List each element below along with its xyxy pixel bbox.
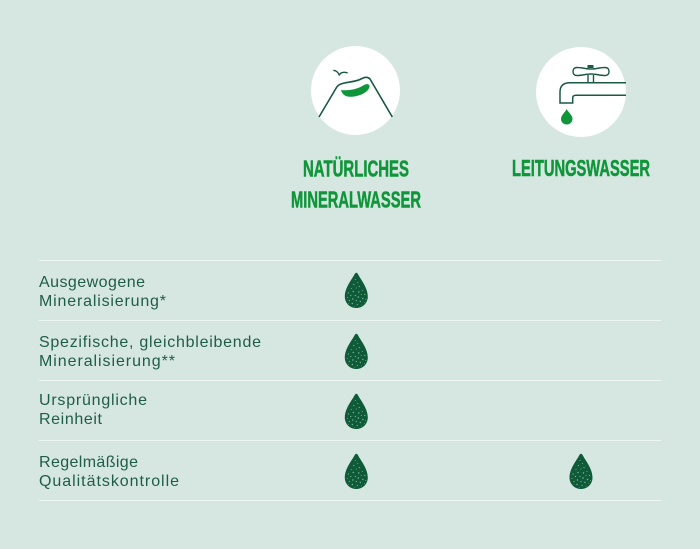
- row 1 label: [39, 274, 166, 310]
- icon: tap: [536, 47, 626, 137]
- row 1 label: Ausgewogene: [39, 274, 145, 291]
- icon: mountain: [311, 46, 400, 135]
- row 2 label: [39, 334, 261, 370]
- row 4 label: [39, 454, 179, 490]
- row 4 label: Qualitätskontrolle: [39, 473, 179, 490]
- row 1 label: Mineralisierung*: [39, 293, 166, 310]
- heading: mineral water: MINERALWASSER: [291, 186, 421, 212]
- row 2 drop: [345, 334, 368, 369]
- heading: mineral water: NATÜRLICHES: [303, 156, 409, 182]
- row 2 label: Spezifische, gleichbleibende: [39, 334, 261, 351]
- row 4 drop: tap water: [570, 454, 592, 489]
- row 2 label: Mineralisierung**: [39, 353, 175, 370]
- row 4 drop: mineral water: [345, 454, 368, 489]
- row 3 label: [39, 392, 147, 428]
- row 3 drop: [345, 394, 368, 429]
- row 3 label: Ursprüngliche: [39, 392, 147, 409]
- row 4 label: Regelmäßige: [39, 454, 138, 471]
- heading: mineral water: [291, 156, 421, 212]
- row 1 drop: [345, 273, 368, 308]
- row 3 label: Reinheit: [39, 411, 103, 428]
